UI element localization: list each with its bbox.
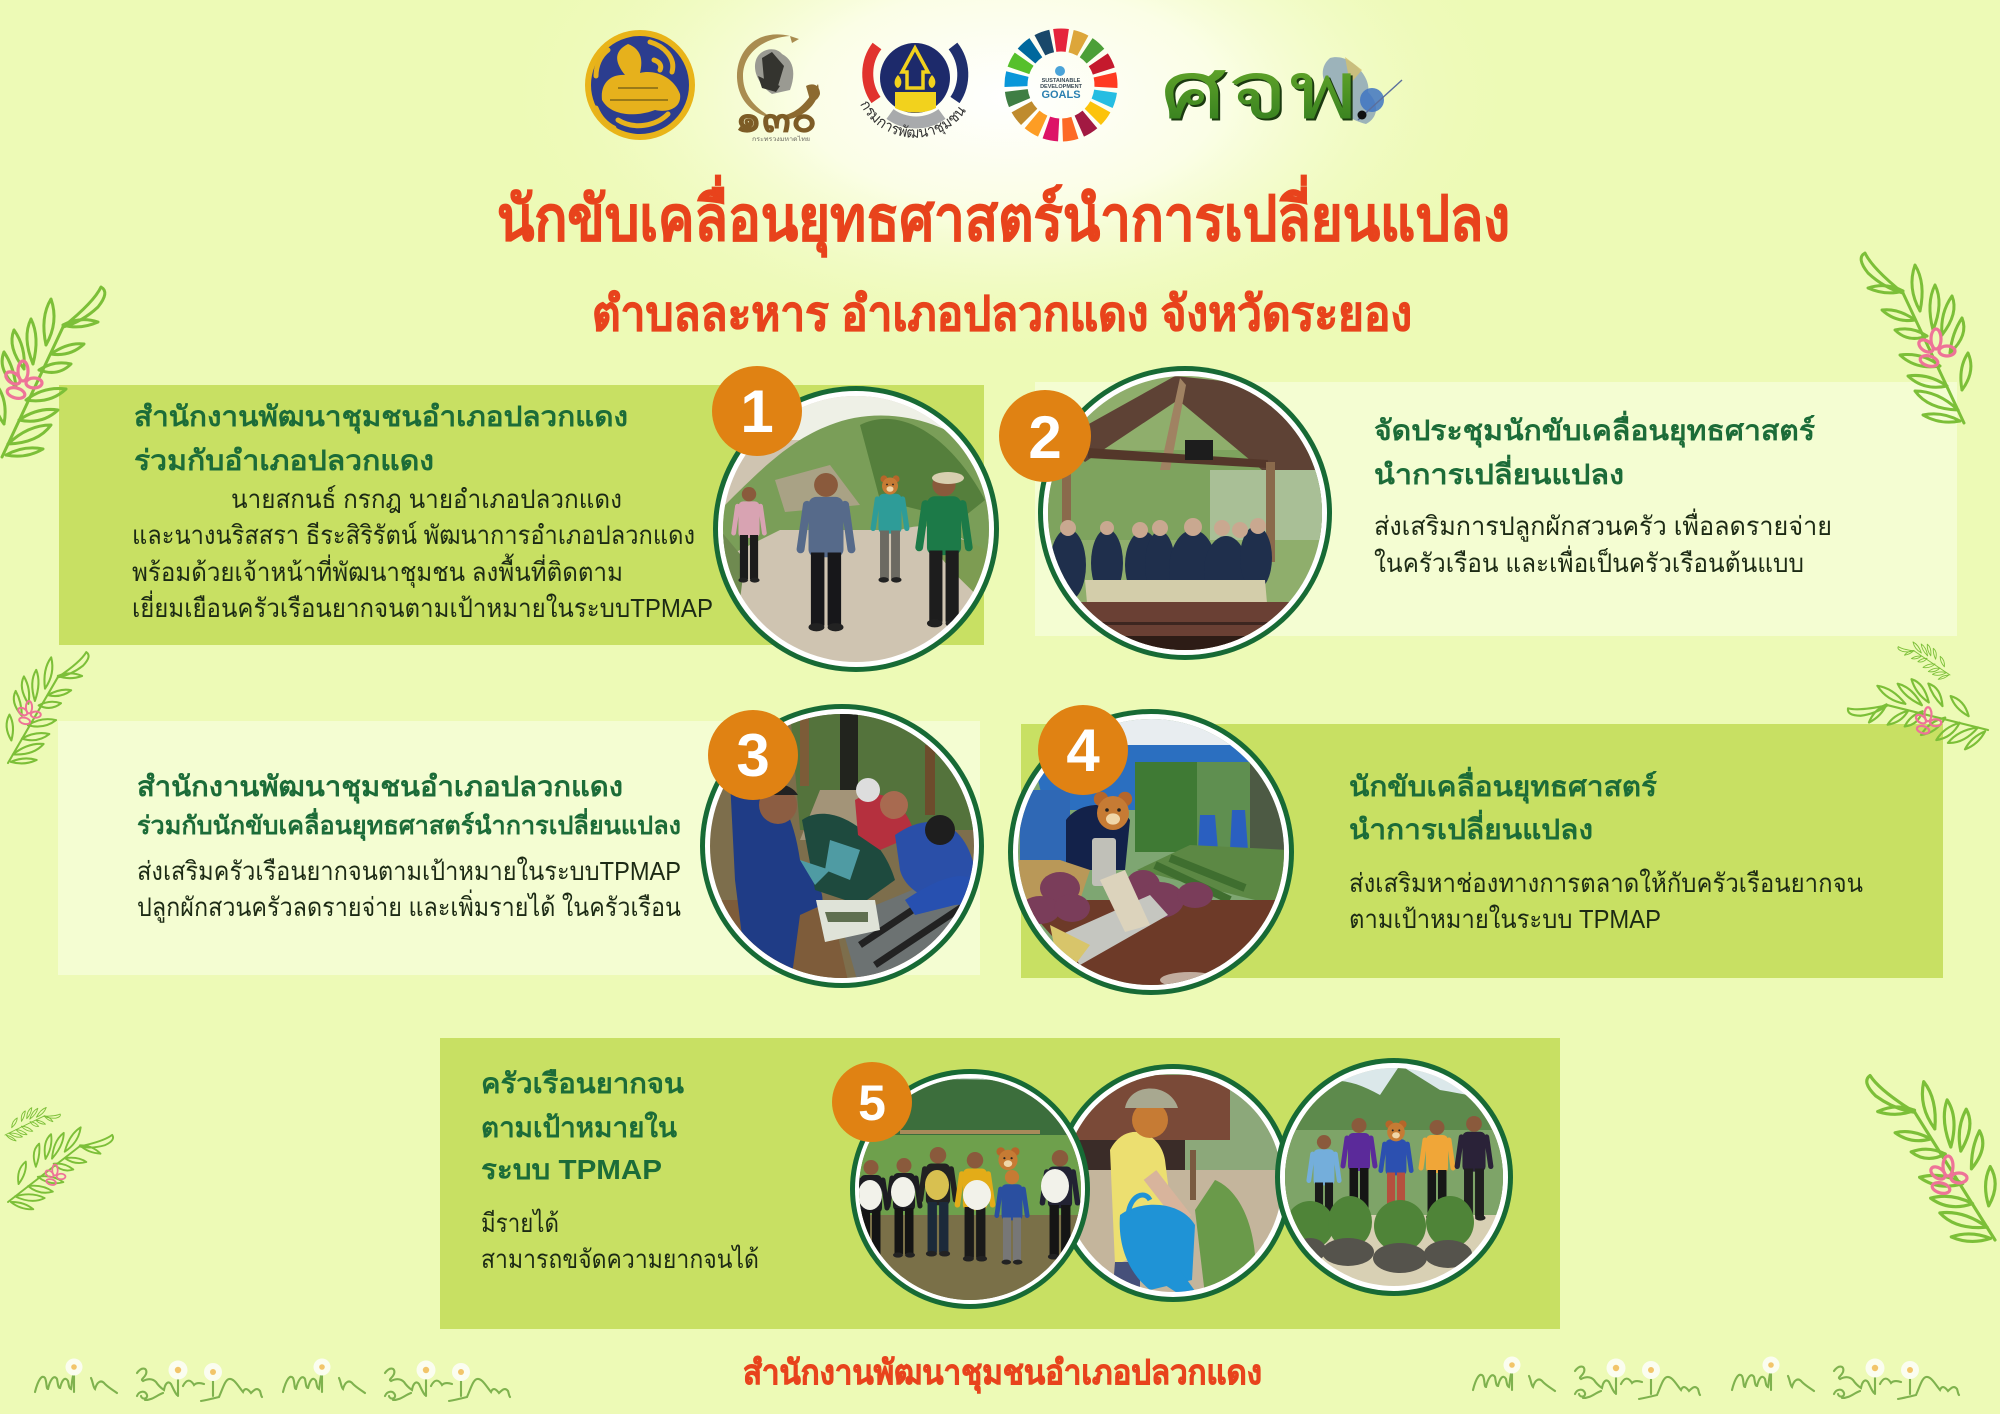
badge 5: 5: [858, 1075, 886, 1131]
decorative sprigs: [0, 253, 2000, 1253]
panel 1 heading: ร่วมกับอำเภอปลวกแดง: [134, 445, 434, 476]
panel 3 heading: [137, 771, 681, 842]
panel 1 heading: สำนักงานพัฒนาชุมชนอำเภอปลวกแดง: [134, 401, 628, 434]
logo: sustainable development goals wheel: SUSTAINABLE: [1042, 78, 1081, 84]
panel 4 body text: ตามเป้าหมายในระบบ TPMAP: [1349, 904, 1661, 934]
grass doodles right: [1473, 1356, 1959, 1399]
panel 3 body text: ปลูกผักสวนครัวลดรายจ่าย และเพิ่มรายได้ ในครัวเรือน: [137, 889, 681, 923]
logo: 130 years: [735, 34, 820, 143]
panel 3 heading: ร่วมกับนักขับเคลื่อนยุทธศาสตร์นำการเปลี่ยนแปลง: [137, 808, 681, 842]
panel 2 background: [1035, 382, 1957, 636]
panel 4 heading: [1349, 766, 1657, 845]
badge 4: [1038, 705, 1128, 795]
panel 1 heading: [134, 401, 628, 476]
panel 4 body text: [1349, 868, 1863, 934]
badge 3: [708, 710, 798, 800]
logo row: [585, 28, 1402, 143]
panel 2 body text: ส่งเสริมการปลูกผักสวนครัว เพื่อลดรายจ่าย: [1374, 508, 1832, 542]
panel 1 body text: และนางนริสสรา ธีระสิริรัตน์ พัฒนาการอำเภอปลวกแดง: [132, 520, 695, 550]
panel 1: [59, 366, 1000, 672]
panel 1 body text: [132, 484, 713, 623]
photo 4: market stall: [1008, 709, 1300, 995]
panel 2: [999, 366, 1957, 666]
panel 2 heading: [1374, 410, 1815, 490]
badge 1: 1: [740, 378, 774, 445]
logo: community development department: กรมการพัฒนาชุมชน: [860, 102, 966, 138]
logo: sustainable development goals wheel: GOALS: [1041, 89, 1081, 101]
badge 2: 2: [1028, 404, 1062, 471]
logo: provincial administration emblem: [585, 30, 695, 140]
panel 4: [1008, 705, 1943, 995]
panel 5 body text: มีรายได้: [481, 1208, 559, 1238]
panel 2 body text: [1374, 508, 1832, 578]
title: นักขับเคลื่อนยุทธศาสตร์นำการเปลี่ยนแปลง: [497, 175, 1510, 257]
logo: ศจพ: [1160, 46, 1402, 137]
panel 3 heading: สำนักงานพัฒนาชุมชนอำเภอปลวกแดง: [137, 771, 623, 804]
photo 5a: group with signs: [850, 1069, 1090, 1310]
panel 5 body text: [481, 1208, 759, 1274]
panel 4 body text: ส่งเสริมหาช่องทางการตลาดให้กับครัวเรือนยากจน: [1349, 868, 1863, 898]
logo: ศจพ: ศจพ: [1162, 48, 1360, 137]
panel 4 heading: นักขับเคลื่อนยุทธศาสตร์: [1349, 766, 1657, 804]
panel 2 heading: นำการเปลี่ยนแปลง: [1374, 454, 1624, 490]
photo 5b: man watering plants: [1054, 1064, 1292, 1302]
photo 3: planting with volunteers: [700, 704, 990, 990]
panel 3: [58, 704, 990, 990]
logo: 130 years: กระทรวงมหาดไทย: [752, 135, 810, 143]
panel 5 heading: ครัวเรือนยากจน: [481, 1068, 684, 1099]
badge 3: 3: [736, 722, 770, 789]
logo: 130 years: ๑๓๐: [735, 99, 817, 141]
logo: community development department: [860, 42, 968, 138]
panel 1 background: [59, 385, 984, 645]
logo: sustainable development goals wheel: [997, 21, 1125, 149]
panel 1 body text: พร้อมด้วยเจ้าหน้าที่พัฒนาชุมชน ลงพื้นที่ติดตาม: [132, 553, 623, 588]
panel 5 heading: ระบบ TPMAP: [481, 1154, 662, 1185]
panel 5: [440, 1038, 1560, 1329]
photo 1: officials visiting village: [713, 386, 1000, 672]
panel 3 background: [58, 721, 980, 975]
badge 5: [832, 1062, 912, 1142]
panel 5 heading: [481, 1068, 684, 1185]
badge 4: 4: [1066, 717, 1100, 784]
panel 2 body text: ในครัวเรือน และเพื่อเป็นครัวเรือนต้นแบบ: [1374, 545, 1804, 578]
panel 1 body text: นายสกนธ์ กรกฎ นายอำเภอปลวกแดง: [231, 484, 622, 514]
badge 2: [999, 390, 1091, 482]
subtitle: ตำบลละหาร อำเภอปลวกแดง จังหวัดระยอง: [592, 288, 1412, 341]
logo: sustainable development goals wheel: DEVELOPMENT: [1040, 84, 1083, 90]
logo: ศจพ: ศจพ: [1160, 46, 1358, 135]
panel 2 heading: จัดประชุมนักขับเคลื่อนยุทธศาสตร์: [1374, 410, 1815, 448]
panel 3 body text: ส่งเสริมครัวเรือนยากจนตามเป้าหมายในระบบTPMAP: [137, 856, 681, 886]
photo 2: meeting under wooden pavilion: [1038, 366, 1332, 666]
panel 4 background: [1021, 724, 1943, 978]
panel 3 body text: [137, 856, 681, 923]
panel 5 heading: ตามเป้าหมายใน: [481, 1111, 677, 1143]
panel 1 body text: เยี่ยมเยือนครัวเรือนยากจนตามเป้าหมายในระบบTPMAP: [132, 590, 713, 623]
footer text: สำนักงานพัฒนาชุมชนอำเภอปลวกแดง: [743, 1354, 1262, 1394]
panel 5 background: [440, 1038, 1560, 1329]
panel 5 body text: สามารถขจัดความยากจนได้: [481, 1244, 759, 1274]
grass doodles left: [35, 1358, 510, 1401]
badge 1: [712, 366, 802, 456]
panel 4 heading: นำการเปลี่ยนแปลง: [1349, 809, 1593, 845]
photo 5c: group in vegetable garden: [1275, 1058, 1515, 1300]
